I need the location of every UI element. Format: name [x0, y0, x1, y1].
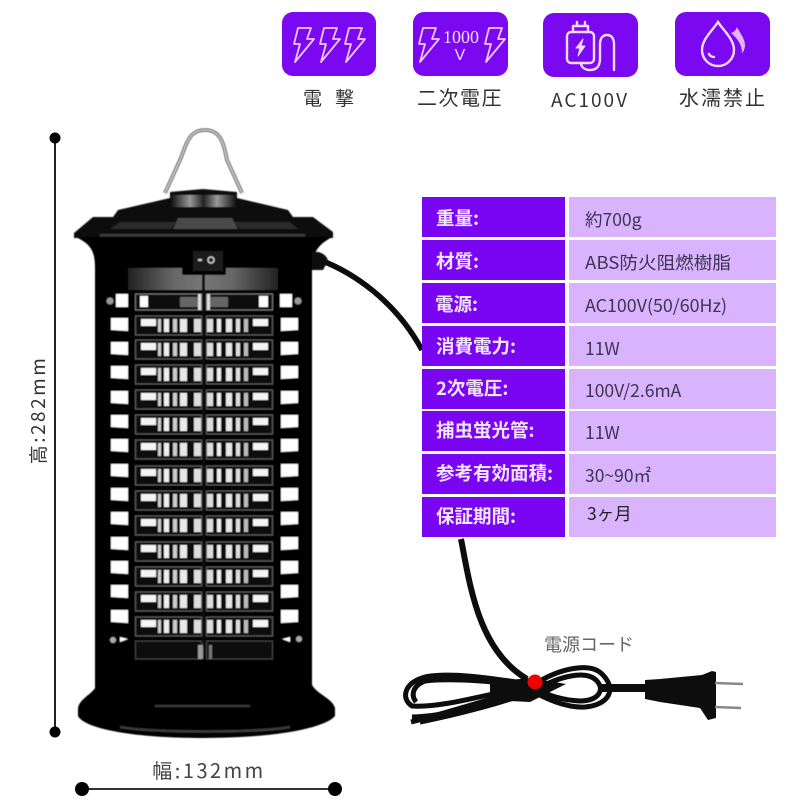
- plug body: [645, 671, 716, 720]
- row: weight: [422, 197, 776, 237]
- plug prongs: [715, 683, 743, 708]
- row label: 消費電力:: [436, 333, 516, 359]
- width dimension line: [75, 782, 342, 796]
- row: power: [422, 283, 776, 323]
- row label: 重量:: [436, 205, 479, 231]
- icon: electric shock badge: [282, 12, 376, 76]
- power cord with plug: [406, 539, 743, 722]
- label: no wetting: 水濡禁止: [679, 82, 767, 111]
- height dimension line: [50, 132, 60, 738]
- grille rows: [136, 316, 272, 636]
- icon: no water badge: [675, 12, 770, 76]
- top grille row: [106, 294, 302, 310]
- row value: 約700g: [585, 207, 642, 232]
- coiled cord: [406, 668, 650, 722]
- icon: secondary voltage badge: [413, 12, 508, 76]
- icon: AC100V badge: [543, 13, 638, 77]
- lamp body: [76, 237, 332, 690]
- label: width: 幅:132mm: [152, 755, 266, 784]
- icon: three lightning bolts: [294, 28, 365, 62]
- upper band: [128, 268, 278, 290]
- row label: 捕虫蛍光管:: [436, 417, 535, 443]
- lower cord: [461, 539, 527, 679]
- hanging handle: [165, 130, 242, 193]
- label: height: 高:282mm: [24, 356, 51, 464]
- row label: 電源:: [435, 291, 478, 317]
- row value: 100V/2.6mA: [585, 378, 682, 403]
- label: power cord: 電源コード: [544, 631, 634, 657]
- row label: 参考有効面積:: [436, 460, 553, 486]
- row: effective area: [422, 454, 776, 494]
- row: material: [422, 240, 776, 280]
- row value: 3ヶ月: [587, 501, 632, 526]
- icon: battery and plug: [567, 22, 614, 70]
- bottom grille row: [110, 636, 302, 659]
- icon: water drops: [702, 22, 745, 66]
- row: warranty: [422, 497, 776, 537]
- lamp base: [78, 685, 335, 738]
- red cable tie: [528, 674, 542, 690]
- icon: voltage bolts: [419, 28, 505, 62]
- row label: 2次電圧:: [436, 375, 508, 401]
- row: secondary voltage: [422, 369, 776, 409]
- row label: 材質:: [436, 248, 479, 274]
- text: 1000: 1000: [443, 27, 479, 47]
- text: volts unit: V: [455, 47, 466, 64]
- row value: AC100V(50/60Hz): [585, 293, 727, 318]
- row value: 11W: [585, 336, 620, 361]
- row label: 保証期間:: [436, 503, 516, 529]
- label: AC100V: AC100V: [551, 86, 629, 113]
- power cord from lamp: [320, 260, 422, 350]
- side slots: [111, 318, 298, 623]
- row: fluorescent tube: [422, 411, 776, 451]
- power switch: [182, 248, 226, 275]
- cord strain relief: [312, 252, 328, 270]
- lamp cap: [74, 189, 333, 238]
- specification table: [422, 197, 776, 537]
- cord bundle at tie: [490, 678, 566, 702]
- lamp product photo: [74, 130, 335, 738]
- label: secondary voltage: 二次電圧: [417, 82, 503, 111]
- row value: 11W: [585, 420, 620, 445]
- row: power consumption: [422, 326, 776, 366]
- label: electric shock: 電撃: [303, 84, 367, 111]
- row value: 30~90㎡: [585, 463, 652, 488]
- row value: ABS防火阻燃樹脂: [585, 250, 731, 275]
